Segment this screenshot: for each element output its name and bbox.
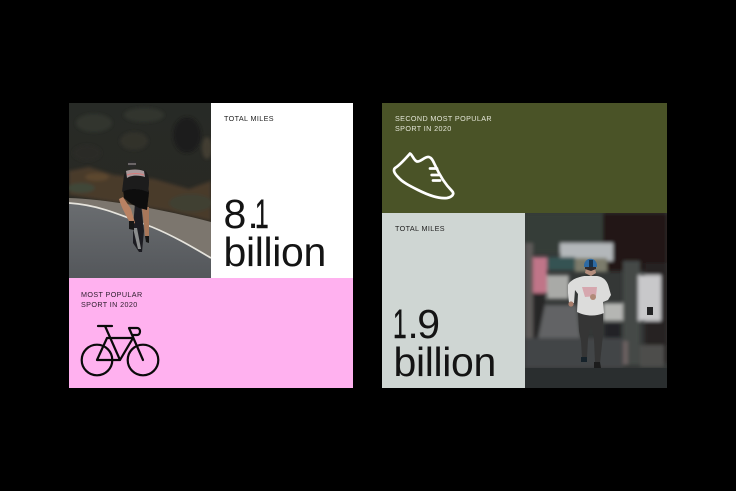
panel: most popular sport bbox=[69, 278, 353, 388]
runner bbox=[568, 259, 611, 368]
cyclist bbox=[119, 160, 149, 252]
label: second most popular sport: SPORT IN 2020 bbox=[395, 124, 452, 132]
figure: 8.1 billion: 1 bbox=[255, 191, 269, 237]
window bbox=[647, 307, 653, 315]
label: total miles: TOTAL MILES bbox=[395, 224, 445, 233]
icon: running shoe bbox=[392, 152, 455, 200]
figure: 8.1 billion: billion bbox=[224, 229, 326, 275]
panel: second most popular sport bbox=[382, 103, 667, 213]
label: second most popular sport: SECOND MOST POPULAR bbox=[395, 114, 492, 123]
label: second most popular sport bbox=[395, 114, 492, 132]
label: most popular sport bbox=[81, 290, 143, 308]
photo: runner on street bbox=[525, 213, 667, 388]
figure: 1.9 billion: .9 bbox=[407, 301, 440, 347]
icon: bicycle bbox=[80, 324, 160, 376]
figure: 8.1 billion: 8. bbox=[224, 191, 255, 237]
card: cycling bbox=[69, 103, 353, 388]
figure: 1.9 billion bbox=[393, 301, 496, 385]
card: running bbox=[382, 103, 667, 388]
label: most popular sport: MOST POPULAR bbox=[81, 290, 143, 299]
label: total miles: TOTAL MILES bbox=[224, 114, 274, 123]
figure: 8.1 billion bbox=[224, 191, 326, 275]
figure: 1.9 billion: 1 bbox=[393, 301, 407, 347]
label: most popular sport: SPORT IN 2020 bbox=[81, 300, 138, 308]
figure: 1.9 billion: billion bbox=[394, 339, 496, 385]
photo: cyclist on road bbox=[69, 103, 211, 278]
